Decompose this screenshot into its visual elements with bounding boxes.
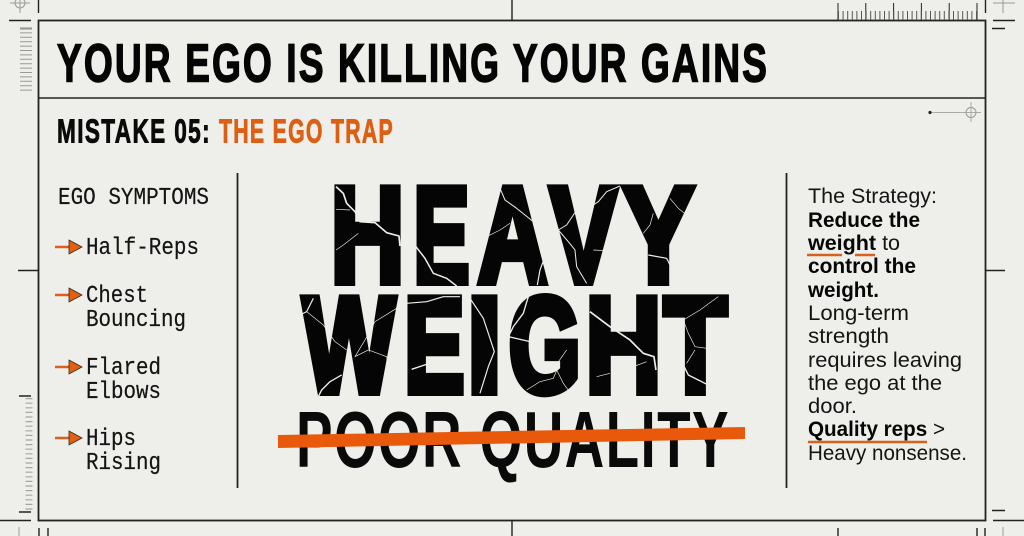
subtitle: mistake 05: MISTAKE 05: bbox=[57, 112, 211, 150]
subtitle: mistake 05: THE EGO TRAP bbox=[219, 112, 394, 150]
panel: the strategy: the ego at the bbox=[808, 371, 942, 395]
symptom: chest bouncing: Bouncing bbox=[86, 307, 186, 334]
panel: ego symptoms bbox=[55, 185, 209, 477]
word: weight: G bbox=[509, 269, 581, 421]
panel: the strategy: strength bbox=[808, 324, 889, 348]
orange strike bar bbox=[278, 427, 745, 448]
subtitle: mistake 05 bbox=[57, 112, 394, 150]
panel: the strategy: Heavy nonsense. bbox=[808, 441, 967, 465]
symptom: hips rising bbox=[55, 426, 161, 477]
word: weight: W bbox=[303, 269, 396, 421]
panel: the strategy: weight. bbox=[807, 278, 879, 302]
word: heavy: V bbox=[550, 159, 617, 311]
struck-through phrase: poor quality: POOR QUALITY bbox=[296, 395, 730, 484]
panel: the strategy: weight to bbox=[807, 231, 900, 255]
word: heavy: A bbox=[478, 159, 547, 311]
panel: the strategy: door. bbox=[808, 394, 857, 418]
symptom: hips rising: Rising bbox=[86, 450, 161, 477]
word: weight: H bbox=[585, 269, 662, 421]
word: heavy: Y bbox=[623, 159, 694, 311]
panel: the strategy: Long-term bbox=[808, 301, 909, 325]
struck-through phrase: poor quality bbox=[278, 395, 745, 484]
panel: the strategy: Quality reps > bbox=[808, 417, 945, 441]
symptom: flared elbows bbox=[55, 355, 161, 406]
panel: the strategy: control the bbox=[808, 254, 916, 278]
panel: the strategy: The Strategy: bbox=[808, 184, 937, 208]
word: weight: T bbox=[664, 269, 727, 421]
crack lines bbox=[300, 186, 718, 397]
word: heavy: H bbox=[331, 159, 404, 311]
symptom: flared elbows: Flared bbox=[86, 355, 161, 382]
symptom: hips rising: Hips bbox=[86, 426, 136, 453]
cracked headline: heavy weight bbox=[300, 159, 727, 421]
symptom: chest bouncing: Chest bbox=[86, 283, 148, 310]
panel: the strategy: requires leaving bbox=[808, 348, 962, 372]
panel: the strategy: Reduce the bbox=[808, 208, 920, 232]
word: weight: I bbox=[467, 269, 502, 421]
symptoms heading: EGO SYMPTOMS bbox=[58, 185, 209, 212]
orange underlines bbox=[807, 255, 927, 442]
word: weight: E bbox=[404, 269, 465, 421]
panel: the strategy bbox=[807, 184, 967, 465]
symptom: half-reps: Half-Reps bbox=[86, 235, 199, 262]
symptom: chest bouncing bbox=[55, 283, 186, 334]
symptom: flared elbows: Elbows bbox=[86, 379, 161, 406]
word: heavy: E bbox=[413, 159, 470, 311]
